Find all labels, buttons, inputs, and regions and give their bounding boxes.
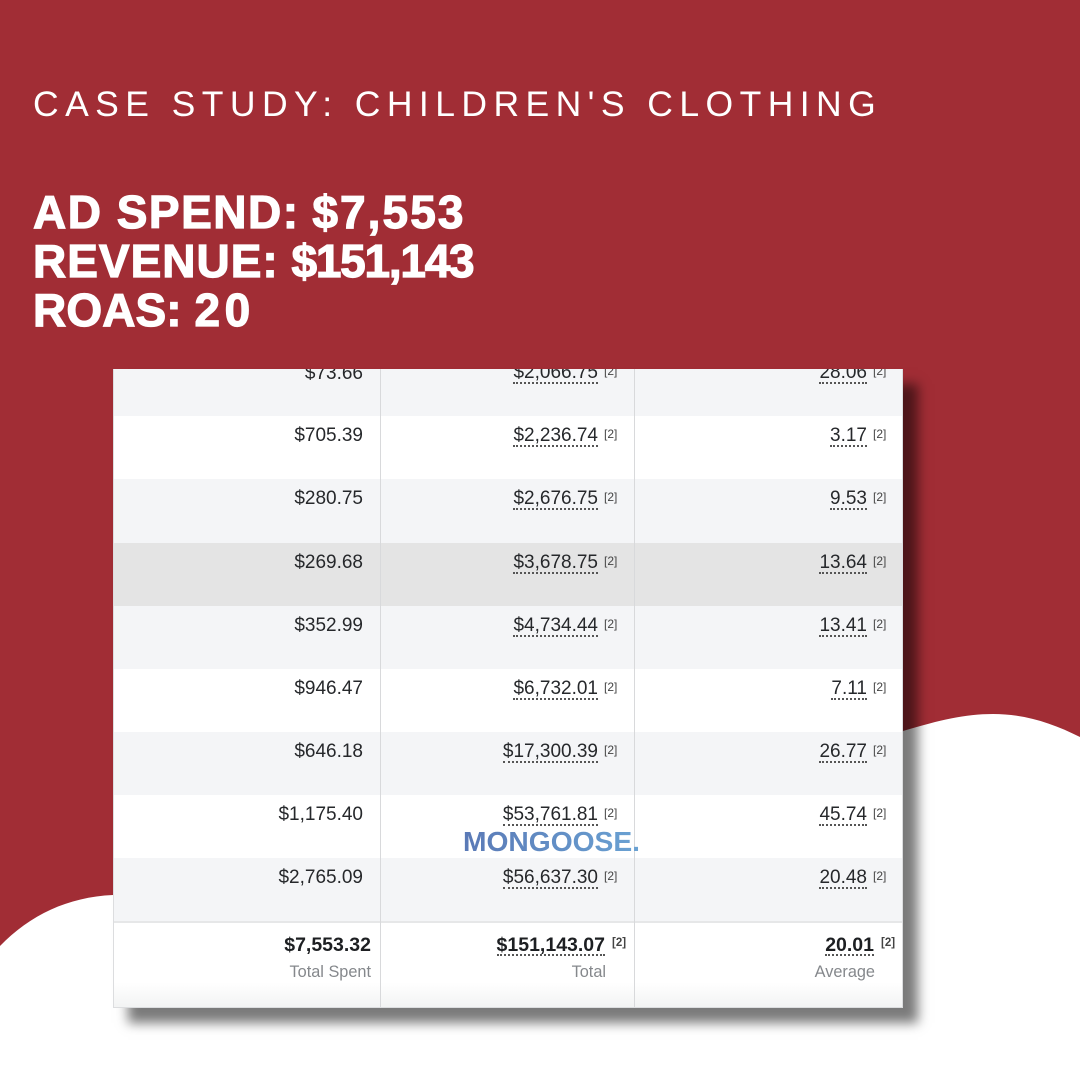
row 4 highlighted: [2] (604, 554, 617, 568)
row 4 highlighted: 13.64 (819, 552, 867, 573)
row 5: $4,734.44 (513, 615, 598, 636)
row 7: $17,300.39 (503, 741, 598, 762)
totals row: Total Spent (290, 963, 371, 981)
totals row: $151,143.07 (497, 934, 605, 956)
row 6: [2] (873, 680, 886, 694)
row 6: $946.47 (294, 678, 363, 699)
headline stats (33, 186, 474, 336)
row 8: $1,175.40 (278, 804, 363, 825)
totals row: [2] (612, 937, 626, 949)
row 2: [2] (873, 427, 886, 441)
row 7 (113, 732, 903, 795)
totals row: $7,553.32 (284, 934, 371, 956)
row 7: 26.77 (819, 741, 867, 762)
row 4 highlighted: $3,678.75 (513, 552, 598, 573)
headline stats: REVENUE: $151,143 (33, 235, 473, 287)
row 2: $705.39 (294, 425, 363, 446)
row 8: [2] (604, 806, 617, 820)
row 3: [2] (873, 490, 886, 504)
row 7: [2] (873, 743, 886, 757)
logo: Mongoose: MONGOOSE. (463, 826, 640, 857)
totals row: Total (572, 963, 606, 981)
row 2: $2,236.74 (513, 425, 598, 446)
row 5: [2] (873, 617, 886, 631)
row 8: 45.74 (819, 804, 867, 825)
row 9: $56,637.30 (503, 867, 598, 888)
row 6: $6,732.01 (513, 678, 598, 699)
row 5 (113, 606, 903, 669)
headline stats: ROAS: 20 (33, 284, 255, 336)
row 6 (113, 669, 903, 732)
row 6: 7.11 (831, 678, 867, 699)
totals row: [2] (881, 937, 895, 949)
row 2: [2] (604, 427, 617, 441)
row 2: 3.17 (830, 425, 867, 446)
totals row: 20.01 (825, 934, 874, 956)
totals row (113, 921, 903, 1008)
row 5: $352.99 (294, 615, 363, 636)
row 3 (113, 479, 903, 543)
headline stats: AD SPEND: $7,553 (33, 186, 466, 238)
totals row: Average (815, 963, 875, 981)
row 3: 9.53 (830, 488, 867, 509)
row 9: $2,765.09 (278, 867, 363, 888)
row 7: [2] (604, 743, 617, 757)
row 5: 13.41 (819, 615, 867, 636)
panel: results table (113, 369, 903, 1008)
row 9: 20.48 (819, 867, 867, 888)
row 9: [2] (873, 869, 886, 883)
row 4 highlighted (113, 543, 903, 606)
row 8: [2] (873, 806, 886, 820)
row 4 highlighted: [2] (873, 554, 886, 568)
row 2 (113, 416, 903, 479)
row 9 (113, 858, 903, 921)
row 3: $280.75 (294, 488, 363, 509)
row 9: [2] (604, 869, 617, 883)
row 3: [2] (604, 490, 617, 504)
row 8 (113, 795, 903, 858)
row 5: [2] (604, 617, 617, 631)
row 3: $2,676.75 (513, 488, 598, 509)
row 1 (113, 353, 903, 416)
title: CASE STUDY: CHILDREN'S CLOTHING (33, 84, 882, 124)
row 7: $646.18 (294, 741, 363, 762)
row 6: [2] (604, 680, 617, 694)
row 4 highlighted: $269.68 (294, 552, 363, 573)
row 8: $53,761.81 (503, 804, 598, 825)
